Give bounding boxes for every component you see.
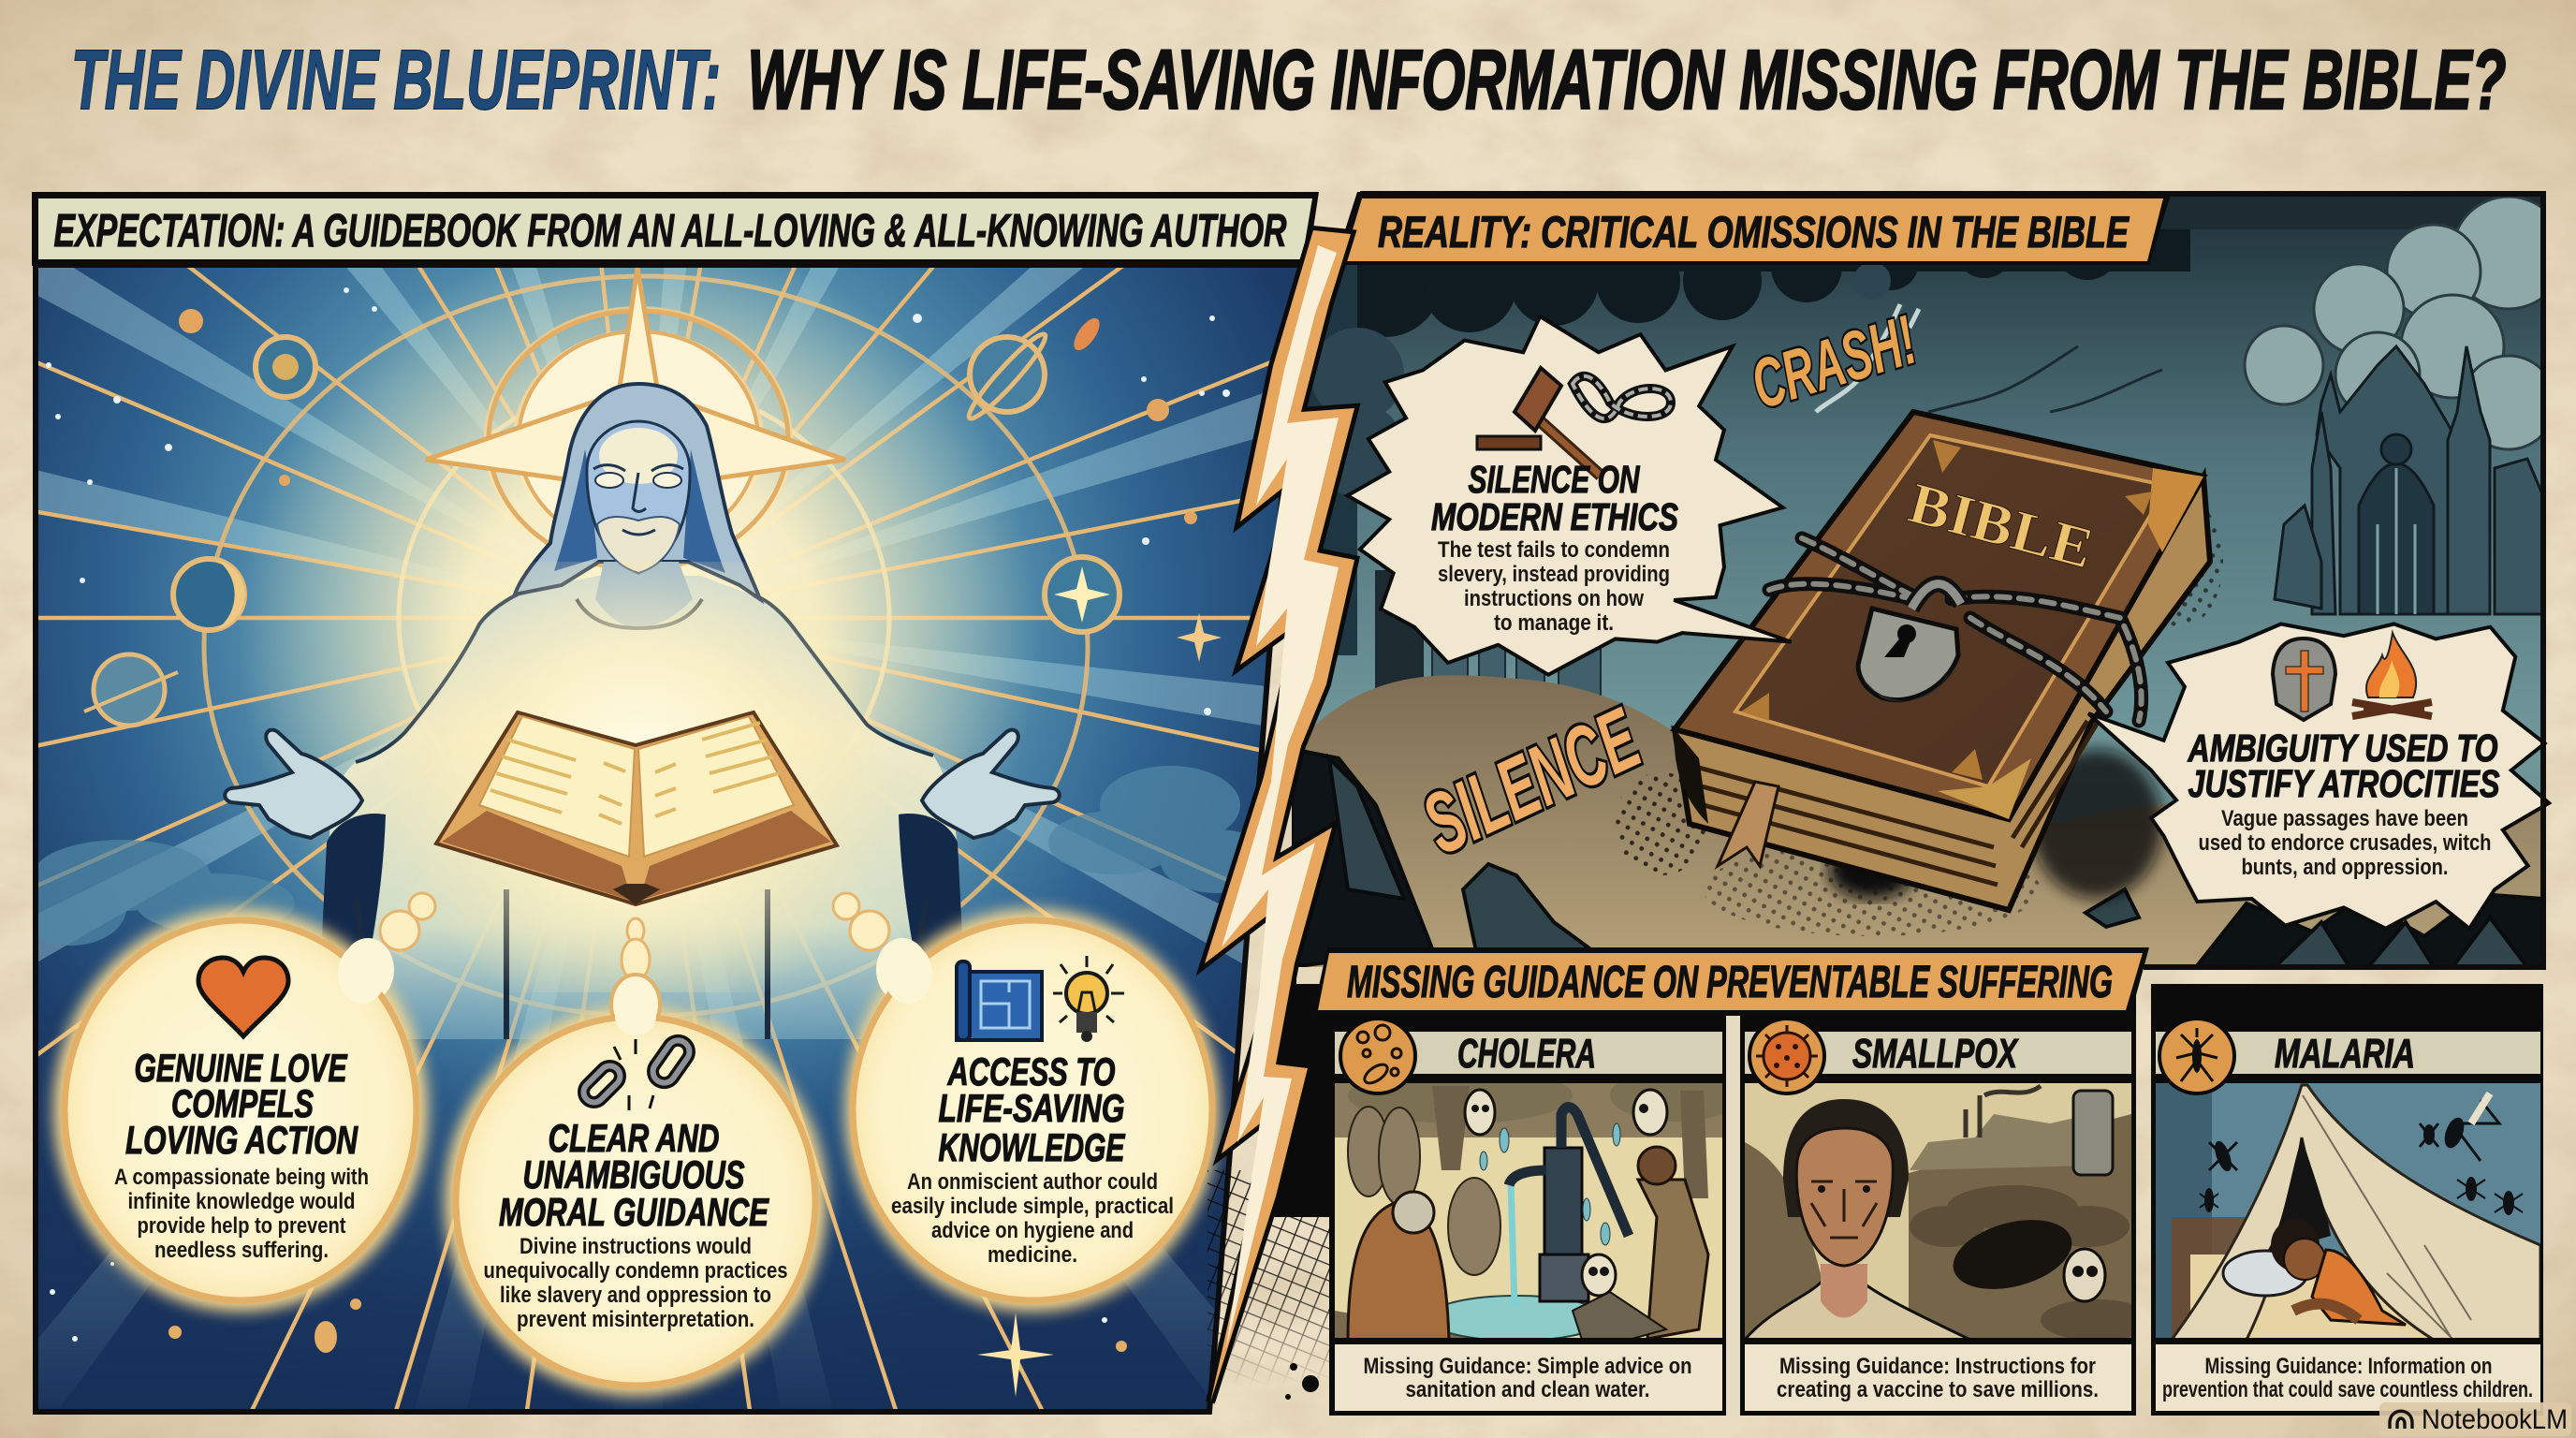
padlock xyxy=(1858,584,1961,701)
scene: survivor and grave xyxy=(1745,1086,2153,1341)
caption xyxy=(1745,1344,2131,1411)
pages and spine xyxy=(1675,477,2210,910)
bubble body text: Divine instructions would xyxy=(520,1234,752,1259)
card: smallpox xyxy=(1745,1019,2153,1411)
sound effect: crash: CRASH! xyxy=(1743,301,1925,423)
cracked ground xyxy=(1292,675,2543,974)
bubble body text: provide help to prevent xyxy=(137,1213,346,1239)
bubble body text xyxy=(483,1234,788,1332)
bubble heading: COMPELS xyxy=(171,1081,314,1125)
disease name: CHOLERA xyxy=(1457,1031,1596,1077)
open glowing book xyxy=(374,562,899,992)
central glow xyxy=(249,268,1028,1004)
ribbon bookmark xyxy=(1718,782,1778,866)
banner: missing guidance: MISSING GUIDANCE ON PREVENTABLE SUFFERING xyxy=(1347,958,2113,1007)
icon: blueprint xyxy=(957,961,1042,1040)
thought bubble: genuine love xyxy=(53,893,435,1312)
callout text: bunts, and oppression. xyxy=(2241,855,2449,880)
callout text: slevery, instead providing xyxy=(1438,562,1670,587)
bubble body text: An onmiscient author could xyxy=(907,1169,1158,1195)
dark backing and halftone xyxy=(1208,968,2543,1416)
planets and stars xyxy=(46,287,1257,1397)
bubble heading xyxy=(125,1046,359,1162)
icon: germs badge xyxy=(1340,1019,1415,1093)
expectation banner: EXPECTATION: A GUIDEBOOK FROM AN ALL-LOVING & ALL-KNOWING AUTHOR xyxy=(54,206,1287,257)
icon: fire xyxy=(2352,633,2432,716)
lightning bolt divider xyxy=(1205,230,1354,1402)
bubble heading: KNOWLEDGE xyxy=(938,1125,1126,1169)
icon: virus badge xyxy=(1749,1019,1824,1093)
bubble body text: infinite knowledge would xyxy=(127,1189,356,1214)
bubble heading: CLEAR AND xyxy=(549,1116,719,1160)
rubble and rocks xyxy=(1292,749,2543,967)
cover xyxy=(1675,412,2203,819)
bubble body text: unequivocally condemn practices xyxy=(483,1258,788,1284)
panel: missing guidance xyxy=(1208,947,2543,1416)
callout heading xyxy=(1431,458,1678,538)
starburst: silence on modern ethics xyxy=(1347,316,1792,675)
icon: heart xyxy=(198,958,288,1036)
bubble heading: ACCESS TO xyxy=(947,1049,1116,1093)
callout text: instructions on how xyxy=(1464,586,1644,611)
bubble heading: MORAL GUIDANCE xyxy=(499,1190,769,1234)
chains xyxy=(1769,538,2142,721)
splatter xyxy=(1615,496,2223,936)
caption: Missing Guidance: Simple advice on xyxy=(1363,1354,1692,1379)
panel frame xyxy=(36,265,1300,1412)
bubble body text: easily include simple, practical xyxy=(891,1194,1174,1219)
icon: gavel xyxy=(1477,368,1601,476)
card: malaria xyxy=(2156,1019,2540,1411)
storm scene xyxy=(1292,192,2565,974)
figure with open arms xyxy=(225,384,1060,1039)
callout heading: MODERN ETHICS xyxy=(1431,495,1678,538)
callout heading: JUSTIFY ATROCITIES xyxy=(2188,762,2499,805)
callout heading xyxy=(2188,726,2499,805)
banner: missing guidance xyxy=(1312,947,2149,1016)
bubble heading: LIFE-SAVING xyxy=(938,1086,1125,1130)
callout text: Vague passages have been xyxy=(2221,806,2468,831)
callout text xyxy=(2198,806,2492,880)
callout text: The test fails to condemn xyxy=(1438,537,1670,563)
bubble body text: needless suffering. xyxy=(154,1238,329,1263)
bubble heading xyxy=(499,1116,769,1234)
panel: expectation xyxy=(0,0,1685,1438)
bubble heading: UNAMBIGUOUS xyxy=(522,1152,745,1196)
icon: chain xyxy=(1573,376,1671,418)
callout heading: AMBIGUITY USED TO xyxy=(2188,726,2498,770)
robe xyxy=(328,576,958,1039)
bubble body text: A compassionate being with xyxy=(114,1165,369,1190)
caption xyxy=(1335,1344,1722,1411)
cosmic illustration background xyxy=(38,268,1297,1409)
reality banner: REALITY: CRITICAL OMISSIONS IN THE BIBLE xyxy=(1378,207,2130,257)
callout text: used to endorce crusades, witch xyxy=(2198,830,2492,856)
callout text xyxy=(1438,537,1670,636)
panel: reality xyxy=(1292,192,2565,974)
icon: mosquito badge xyxy=(2159,1019,2234,1093)
bubble body text: medicine. xyxy=(988,1242,1077,1268)
title: THE DIVINE BLUEPRINT: xyxy=(71,34,721,127)
hands xyxy=(922,730,1060,838)
sound effect: silence: SILENCE xyxy=(1410,690,1655,873)
bubble body text: advice on hygiene and xyxy=(931,1218,1134,1243)
disease name: SMALLPOX xyxy=(1852,1031,2019,1077)
dark storm clouds xyxy=(1292,192,2546,655)
bubble body text xyxy=(114,1165,369,1263)
caption: creating a vaccine to save millions. xyxy=(1777,1377,2099,1402)
bubble body text: prevent misinterpretation. xyxy=(517,1307,754,1332)
bubble body text: like slavery and oppression to xyxy=(500,1283,771,1308)
icon: broken chain xyxy=(579,1036,694,1107)
expectation banner xyxy=(32,192,1319,266)
bubble heading xyxy=(938,1049,1126,1169)
bubble heading: LOVING ACTION xyxy=(125,1118,359,1162)
callout heading: SILENCE ON xyxy=(1468,458,1641,501)
thought bubble: moral guidance xyxy=(445,918,827,1396)
clouds xyxy=(14,766,1273,946)
disease name: MALARIA xyxy=(2275,1031,2415,1077)
sleeves xyxy=(899,814,962,992)
bubble heading: GENUINE LOVE xyxy=(135,1046,348,1090)
thought bubble: knowledge xyxy=(833,893,1220,1312)
face xyxy=(587,421,690,573)
caption: sanitation and clean water. xyxy=(1406,1377,1649,1402)
card: cholera xyxy=(1335,1019,1741,1411)
callout text: to manage it. xyxy=(1494,610,1614,636)
ruins left xyxy=(1376,571,1601,712)
bubble body text xyxy=(891,1169,1174,1268)
neck and collar xyxy=(595,562,693,628)
starburst: ambiguity xyxy=(2088,624,2549,929)
pale clouds xyxy=(2245,197,2565,449)
chained Bible: BIBLE xyxy=(1902,471,2100,581)
scene: child under torn net xyxy=(2156,1081,2540,1340)
reality banner xyxy=(1334,192,2172,265)
halo xyxy=(426,268,845,569)
watermark: NotebookLM xyxy=(2379,1402,2571,1436)
ruined cathedral xyxy=(2275,346,2543,614)
chained Bible xyxy=(1675,412,2210,910)
icon: light bulb xyxy=(1053,956,1124,1042)
panel frame xyxy=(1360,194,2543,967)
caption xyxy=(2156,1344,2540,1411)
scene: water pump xyxy=(1335,1067,1741,1341)
icon: knight helmet xyxy=(2273,638,2335,720)
orbit rings xyxy=(204,276,1088,1016)
caption: Missing Guidance: Information on xyxy=(2205,1354,2492,1379)
hair xyxy=(515,384,760,599)
caption: Missing Guidance: Instructions for xyxy=(1779,1354,2096,1379)
